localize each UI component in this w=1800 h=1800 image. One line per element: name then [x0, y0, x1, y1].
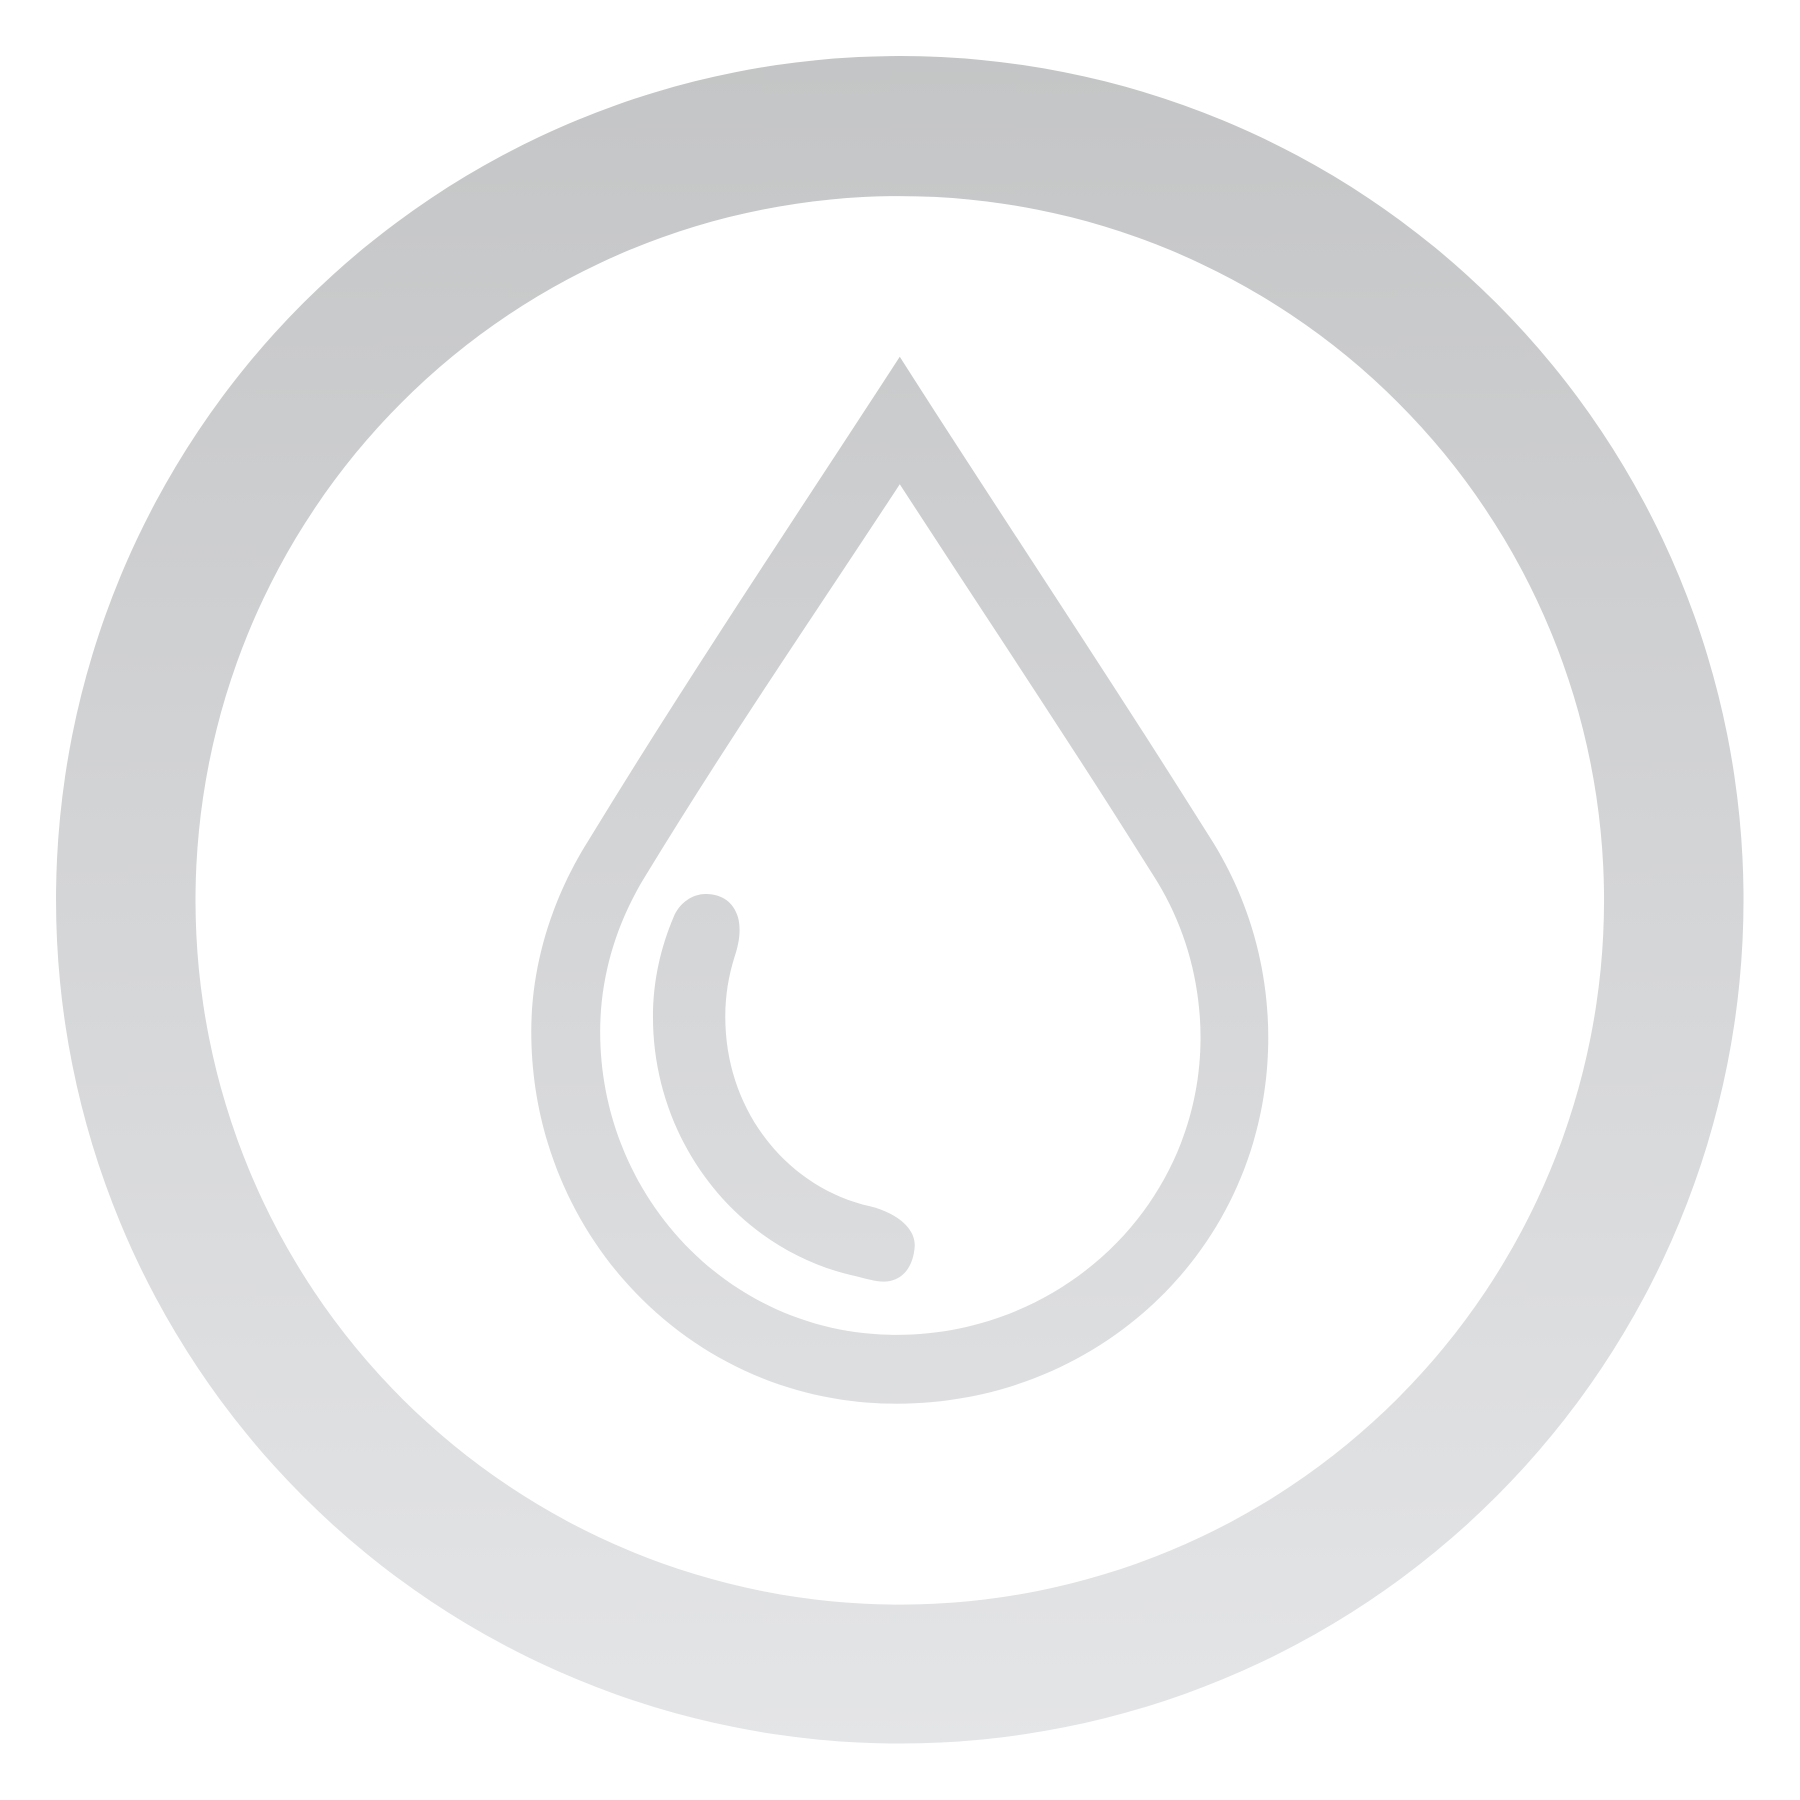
drop highlight — [653, 894, 915, 1282]
water drop outline — [531, 357, 1268, 1404]
